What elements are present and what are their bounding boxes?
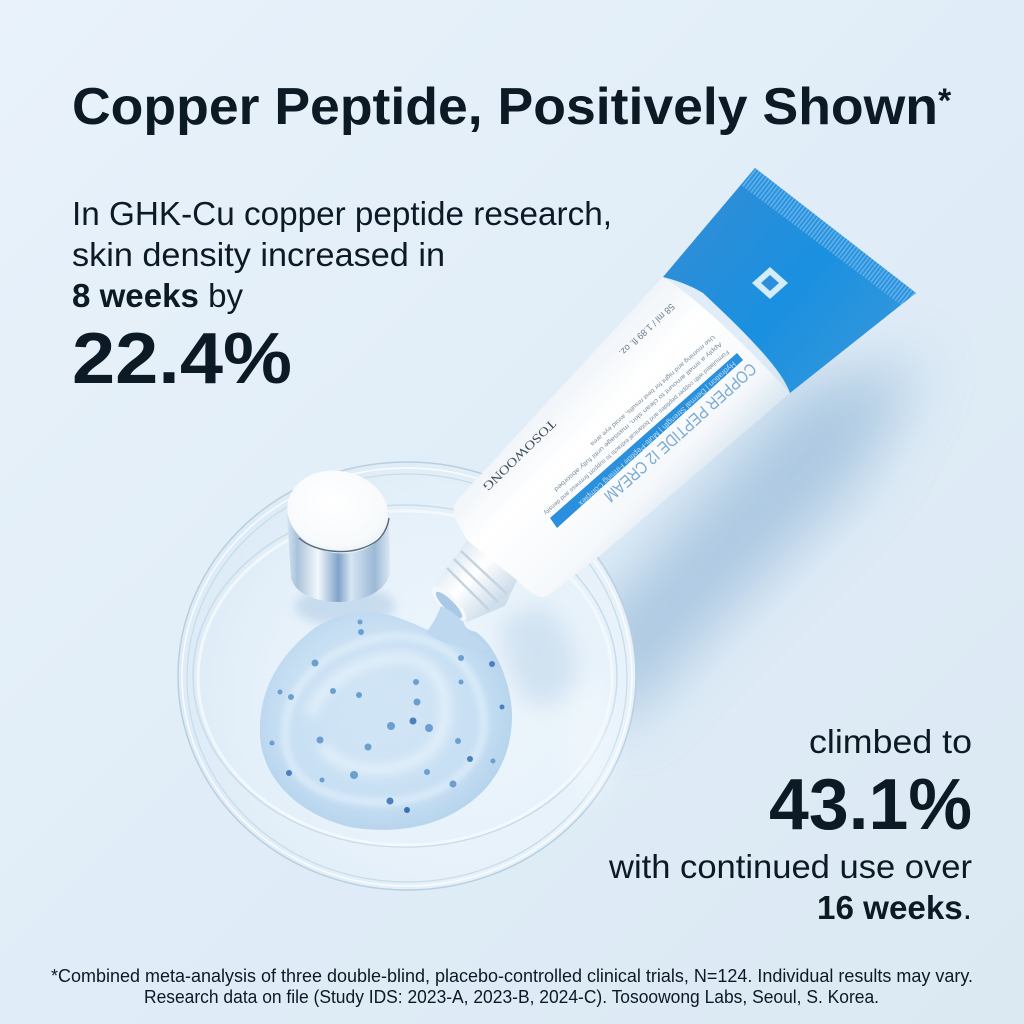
volume text: 58 ml / 1.89 fl. oz. bbox=[616, 301, 676, 358]
footnote: *Combined meta-analysis of three double-blind, placebo-controlled clinical trials, N=124. Individual results may vary. bbox=[51, 966, 973, 986]
text block: 16 week result: with continued use over bbox=[608, 848, 972, 885]
title: Copper Peptide, Positively Shown bbox=[72, 78, 938, 136]
text block: 16 week result: climbed to bbox=[809, 723, 972, 760]
text block: 16 week result: 16 weeks. bbox=[817, 889, 972, 926]
logo square bbox=[752, 267, 788, 299]
product name: COPPER PEPTIDE I2 CREAM bbox=[600, 359, 760, 506]
crimp band bbox=[741, 168, 916, 305]
label bar bbox=[550, 353, 743, 528]
text block: 16 week result bbox=[608, 723, 972, 926]
footnote: Research data on file (Study IDS: 2023-A, 2023-B, 2024-C). Tosoowong Labs, Seoul, S. Korea. bbox=[144, 987, 879, 1007]
silver cap bbox=[280, 461, 396, 602]
text block: 8 week result: In GHK-Cu copper peptide research, bbox=[72, 195, 612, 232]
tube bbox=[427, 168, 916, 626]
tube blue end bbox=[663, 168, 916, 393]
small description text: Formulated with copper peptides and botanical extracts to support firmness and density bbox=[542, 349, 730, 515]
stat: 22.4%: 22.4% bbox=[72, 319, 292, 399]
text block: 8 week result bbox=[72, 195, 612, 399]
text block: 8 week result: 8 weeks by bbox=[72, 277, 243, 314]
small description text: Use morning and night for best results, avoid eye area bbox=[588, 334, 716, 447]
text block: 8 week result: skin density increased in bbox=[72, 236, 445, 273]
tube white body bbox=[454, 277, 790, 597]
tube neck and threads bbox=[427, 540, 517, 626]
footnote bbox=[51, 966, 973, 1007]
label bar text: Hydration | Dermal Strength | Multi-Peptide Firming Complex bbox=[577, 360, 738, 508]
stat: 43.1%: 43.1% bbox=[769, 765, 972, 845]
brand name: TOSOWOONG bbox=[480, 417, 559, 494]
cream stream bbox=[426, 606, 490, 649]
cream beads bbox=[270, 620, 504, 813]
cap shadow bbox=[295, 586, 395, 626]
small description text: Apply a small amount to clean skin, massage until fully absorbed bbox=[552, 341, 723, 492]
petri dish bbox=[178, 462, 636, 890]
cream blob bbox=[260, 606, 512, 830]
tube shadow bbox=[570, 360, 925, 730]
title: * bbox=[938, 82, 952, 120]
